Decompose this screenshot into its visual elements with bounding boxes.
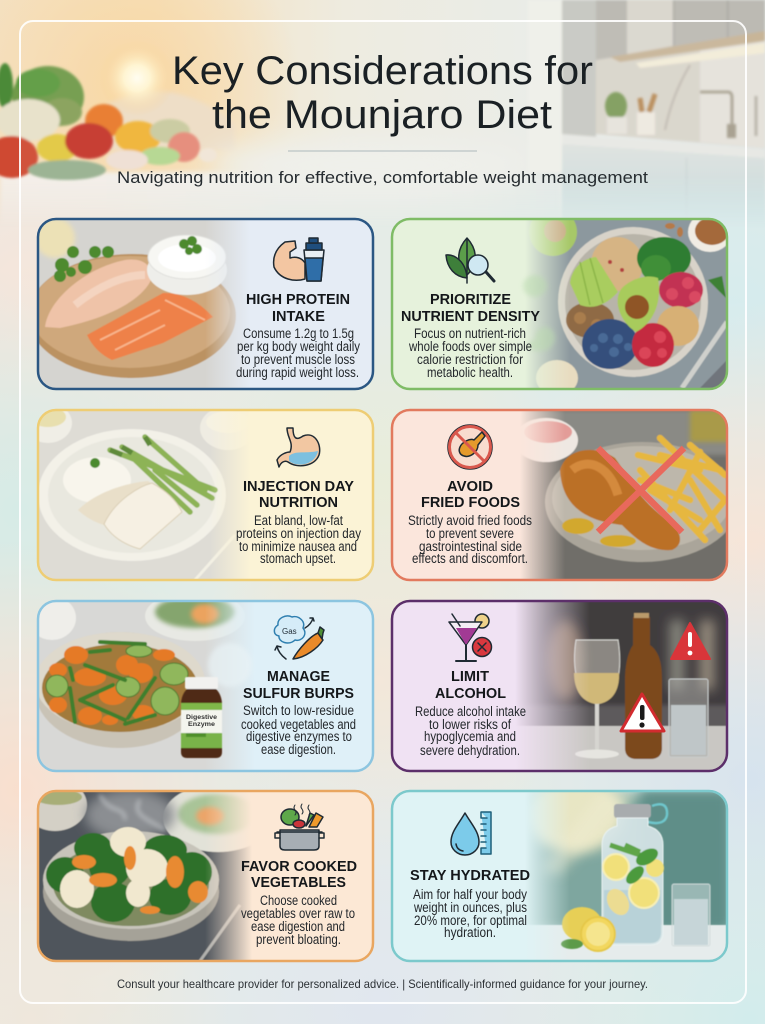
icon: gas cloud and carrot: Gas [282, 627, 297, 636]
heading: SULFUR BURPS [243, 686, 354, 702]
heading [435, 669, 506, 702]
text block: Focus on nutrient-rich [414, 326, 526, 341]
bottle label: Enzyme [188, 722, 216, 728]
text block: proteins on injection day [236, 526, 361, 541]
text block: hydration. [444, 925, 496, 940]
heading: AVOID [447, 479, 493, 495]
title: the Mounjaro Diet [212, 93, 552, 137]
photo: nutrient bowl [522, 220, 726, 388]
heading: INJECTION DAY [243, 479, 354, 495]
panel: avoid fried foods [392, 410, 739, 580]
text block: to lower risks of [429, 717, 511, 732]
kitchen wall and cabinets [561, 0, 765, 216]
title: Key Considerations for [172, 49, 593, 93]
heading: ALCOHOL [435, 686, 506, 702]
panel: manage sulfur burps [28, 591, 373, 771]
text block: Switch to low-residue [243, 703, 354, 718]
heading: STAY HYDRATED [410, 868, 530, 884]
text block: metabolic health. [427, 365, 513, 380]
text block: 20% more, for optimal [414, 913, 527, 928]
text block: during rapid weight loss. [236, 365, 359, 380]
text block: Choose cooked [260, 893, 337, 908]
photo: steamed vegetables [39, 792, 250, 960]
text block: Aim for half your body [413, 887, 527, 902]
text block: hypoglycemia and [424, 729, 516, 744]
text block: to minimize nausea and [239, 539, 357, 554]
text block [241, 893, 355, 947]
text block [413, 887, 527, 940]
photo: wine, beer and water [518, 602, 726, 770]
panel: stay hydrated [392, 777, 730, 966]
icon: warning triangle white [621, 694, 664, 731]
panel: favor cooked vegetables [23, 779, 373, 961]
subtitle: Navigating nutrition for effective, comfortable weight management [117, 168, 648, 187]
text block: ease digestion. [261, 742, 336, 757]
icon: bicep and shaker [274, 238, 324, 281]
photo: lemon water bottle [529, 792, 726, 960]
panel: injection day nutrition [24, 403, 373, 580]
text block [241, 703, 356, 757]
heading: PRIORITIZE [430, 292, 511, 308]
text block: Reduce alcohol intake [415, 704, 526, 719]
text block: severe dehydration. [420, 743, 520, 758]
heading [243, 479, 354, 511]
text block: to prevent severe [426, 526, 514, 541]
text block: Consume 1.2g to 1.5g [243, 326, 354, 341]
text block: prevent bloating. [256, 932, 341, 947]
heading: VEGETABLES [251, 875, 346, 891]
text block: calorie restriction for [417, 352, 523, 367]
photo: fish, rice, asparagus [39, 411, 238, 579]
icon: warning triangle red [671, 623, 710, 659]
heading: FAVOR COOKED [241, 859, 357, 875]
heading [241, 859, 357, 891]
heading: NUTRIENT DENSITY [401, 309, 540, 325]
heading [401, 292, 540, 325]
icon: stomach [277, 428, 320, 467]
text block: cooked vegetables and [241, 717, 356, 732]
bottle label [186, 715, 218, 728]
text block: to prevent muscle loss [241, 352, 355, 367]
icon: leaves and magnifier [446, 238, 494, 283]
heading: FRIED FOODS [421, 495, 520, 511]
icon: cocktail with cross [449, 614, 492, 661]
panel: high protein intake [28, 218, 373, 389]
text block: Strictly avoid fried foods [408, 513, 532, 528]
heading [246, 292, 350, 325]
heading: HIGH PROTEIN [246, 292, 350, 308]
text block: Eat bland, low-fat [254, 513, 343, 528]
heading [421, 479, 520, 511]
heading: INTAKE [272, 309, 325, 325]
panel: limit alcohol [392, 601, 730, 772]
text block [408, 513, 532, 566]
title divider [288, 150, 477, 152]
icon: crossed-out drumstick [448, 425, 492, 469]
icon: gas cloud and carrot [274, 616, 324, 659]
icon: water drop and ruler [451, 812, 491, 855]
bottle label: Digestive [186, 715, 218, 721]
panel: prioritize nutrient density [392, 208, 732, 396]
photo: fried chicken and fries [522, 411, 726, 579]
text block [236, 513, 361, 566]
photo: digestive enzyme bottle [181, 677, 222, 758]
text block: vegetables over raw to [241, 906, 355, 921]
heading: MANAGE [267, 669, 330, 685]
text block: weight in ounces, plus [413, 900, 527, 915]
text block [415, 704, 526, 758]
text block: gastrointestinal side [419, 539, 522, 554]
heading: LIMIT [451, 669, 489, 685]
heading: NUTRITION [259, 495, 338, 511]
text block: whole foods over simple [408, 339, 532, 354]
text block: digestive enzymes to [246, 729, 352, 744]
text block: per kg body weight daily [237, 339, 360, 354]
title [172, 49, 593, 137]
text block [408, 326, 532, 380]
photo: cooked vegetables and enzyme bottle [39, 602, 244, 770]
photo: chicken and salmon [39, 220, 240, 388]
text block: effects and discomfort. [412, 551, 528, 566]
heading [243, 669, 354, 702]
footer note: Consult your healthcare provider for personalized advice. | Scientifically-informed guidance for your journey. [117, 977, 648, 991]
text block: ease digestion and [251, 919, 345, 934]
icon: pot of vegetables [275, 804, 324, 850]
background: blurred kitchen photo [0, 0, 765, 207]
vegetables [0, 63, 217, 180]
text block [236, 326, 360, 380]
text block: stomach upset. [260, 551, 336, 566]
